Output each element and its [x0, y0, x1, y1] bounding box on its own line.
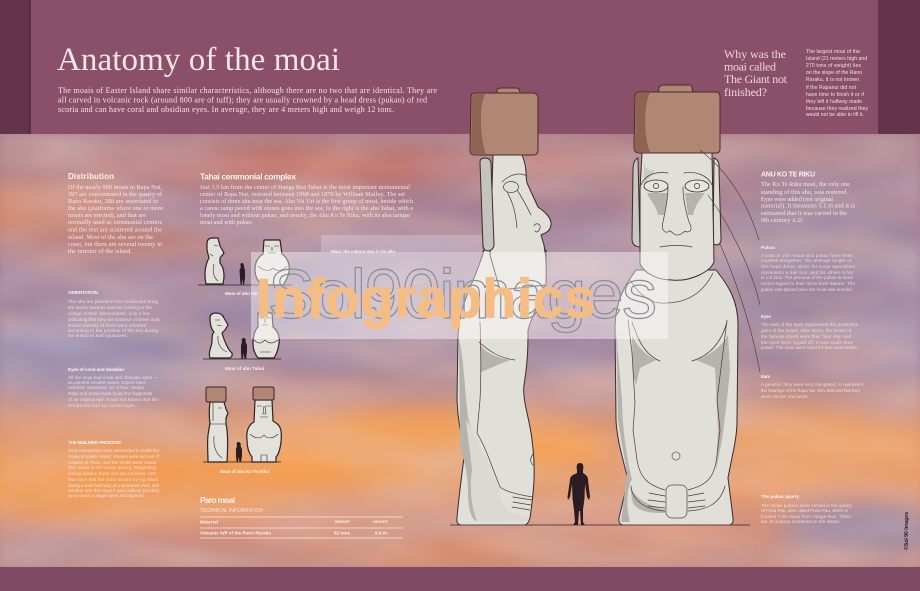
panel: the building process: that says that the moai moved by log sleds	[68, 477, 159, 482]
panel: eyes of coral and obsidian: restored, measured, 10 of their. Sergio	[68, 385, 144, 390]
panel: the pukao quarry: of Puna Pau, also called Puna Pau, which is	[761, 508, 849, 513]
body text: the ahu (platforms where one or more	[68, 205, 163, 212]
sidebar text: they left it halfway made	[806, 99, 862, 105]
panel: orientation: The ahu are placed in four moais and bring	[68, 299, 158, 304]
watermark outline text: Sol90images	[268, 255, 657, 333]
panel: anu ko te riku: The Ko Te Riku moai, the only one	[761, 181, 850, 188]
sidebar heading: why was the moai called The Giant not finished	[724, 47, 788, 99]
body text	[68, 184, 163, 255]
panel: paro moai technical information table	[200, 496, 403, 538]
ground line	[450, 524, 750, 526]
body text: consists of three ahu near the sea. Ahu Vai Uri is the first group of moai, beside which	[200, 198, 413, 205]
panel: ears note: Ears	[761, 374, 770, 379]
icon: human scale figure	[568, 463, 590, 525]
body	[615, 270, 738, 525]
ears	[632, 158, 640, 247]
heading: Tahai ceremonial complex	[200, 172, 296, 182]
head	[490, 155, 551, 290]
small moai group: ahu Ko Te Riku	[203, 387, 281, 474]
sidebar text: on the slope of the Rano	[806, 70, 862, 76]
body text: center of Rapa Nui, restored between 1968 and 1970 by William Mulloy. The set	[200, 191, 405, 198]
body text: coast, but there are several twenty in	[68, 241, 162, 248]
panel: paro moai technical information table: WEIGHT	[335, 520, 351, 524]
sidebar heading: why was the moai called The Giant not finished: Why was the	[724, 47, 786, 61]
panel: eyes of coral and obsidian: Eyes of coral and obsidian	[68, 367, 124, 373]
panel: anu ko te riku: estimated that it was carved in the	[761, 210, 847, 217]
panel: orientation: known thereby of them were oriented	[68, 323, 146, 328]
panel: eyes of coral and obsidian: sculptures had so carved eyes.	[68, 403, 136, 408]
intro text: scoria and can have coral and obsidian eyes. In average, they are 4 meters high and weigh 12 tons.	[58, 105, 394, 114]
panel: eyes note: power. The eyes were used for few ceremonies.	[761, 345, 858, 350]
panel: ears note: the hearings of the Rapa Nui, they believed that they	[761, 388, 861, 393]
body text: Of the nearly 900 moais in Rapa Nui,	[68, 184, 162, 191]
panel: eyes note: the eyes were ripped off. It was made their	[761, 340, 854, 345]
large front view moai hat	[634, 85, 720, 153]
watermark	[251, 235, 668, 339]
panel: orientation: the backs towards and are looking to the	[68, 305, 152, 310]
panel: ears note: A general, they were very elongated, to represent	[761, 382, 864, 387]
large side view moai	[457, 155, 551, 525]
sidebar text: Raraku. It is not known	[806, 77, 859, 83]
body text	[200, 184, 413, 226]
watermark solid text: Infographics	[256, 267, 595, 329]
sidebar text: would not be able to lift it.	[806, 112, 864, 118]
panel: pukao note: A total of 100 moais with pukao have been	[761, 253, 853, 258]
panel: pukao note: represents a hair bun, and for others a hat	[761, 270, 854, 275]
caption: Moai of ahu Ko Te Riku	[220, 469, 269, 474]
panel: anu ko te riku	[761, 172, 856, 224]
panel: the pukao quarry: are 31 pukaos scattered on the island.	[761, 519, 840, 524]
sidebar text: The largest moai of the	[806, 49, 860, 55]
panel: anu ko te riku: 9th century A.D.	[761, 217, 804, 224]
panel: eyes of coral and obsidian: Rapu and Sonia Haoa found the fragments	[68, 391, 153, 396]
panel: anu ko te riku: ANU KO TE RIKU	[761, 172, 815, 178]
panel: pukao note: this head dress, which for some specialists	[761, 264, 856, 269]
large front view moai	[615, 153, 738, 525]
watermark note: Moai, the culture was in its ahu	[331, 249, 395, 254]
body text: moais are erected), and that are	[68, 212, 146, 219]
panel: the building process: that stood in the same quarry. Regarding	[68, 465, 156, 470]
heading: Distribution	[68, 172, 114, 181]
panel: the building process: during a work harmony of a seasoned chief, and	[68, 483, 159, 488]
credit: ©Sol 90 Images	[903, 512, 910, 550]
body text: the interior of the island.	[68, 248, 132, 255]
panel: the building process: up to reach a stage open and tapered.	[68, 493, 145, 498]
intro text	[58, 86, 437, 114]
panel: orientation	[68, 290, 161, 338]
human	[236, 442, 242, 462]
small moai group: ahu Tahai	[203, 313, 281, 371]
panel: ears note: were shorter and wider.	[761, 394, 809, 399]
panel: paro moai technical information table: 9.8 m	[375, 530, 387, 536]
panel: paro moai technical information table: Material	[200, 520, 218, 524]
body text: moai and with pukao.	[200, 220, 253, 226]
intro text: all carved in volcanic rock (around 800 are of tuff); they are usually crowned by a head dress (pukao) of red	[58, 96, 427, 104]
panel: the building process: moais of Easter Island. Statues were torn out of	[68, 454, 160, 459]
panel: the pukao quarry	[761, 494, 853, 524]
panel: the building process: volcano at Rano, and the moais were raised	[68, 460, 156, 465]
panel: orientation: the solstices and equinoxes.	[68, 333, 128, 338]
sidebar text	[806, 49, 868, 118]
sidebar text: have time to finish it or if	[806, 92, 865, 98]
panel: the pukao quarry: located 7 km away from Hanga Roa. There	[761, 514, 851, 519]
panel: paro moai technical information table: 82 tons	[334, 530, 350, 536]
body text: normally used as ceremonial centers	[68, 219, 163, 226]
panel: the pukao quarry: The pukao quarry	[761, 494, 799, 499]
panel: eyes of coral and obsidian: All the moai had coral and obsidian eyes —	[68, 375, 158, 380]
panel: pukao note: recent regard to their three-level feature. The	[761, 281, 855, 286]
panel: pukao note	[761, 245, 856, 292]
front moai	[247, 400, 281, 462]
leader lines	[700, 150, 760, 372]
body text: 397 are concentrated in the quarry of	[68, 191, 163, 198]
panel: orientation: indicating that they are instance of sheer daily	[68, 317, 161, 322]
large side view moai hat	[470, 88, 538, 155]
panel: the pukao quarry: The moais pukaos were carved in the quarry	[761, 503, 853, 508]
panel: pukao note: pukao was placed once the moai was erected.	[761, 287, 853, 292]
panel: orientation: village of their descendants; only a few	[68, 311, 151, 316]
title: Anatomy of the moai	[57, 42, 340, 78]
panel: distribution	[68, 172, 163, 255]
panel: the building process: another one that says it was walked standing	[68, 488, 159, 493]
panel: paro moai technical information table: TECHNICAL INFORMATION	[200, 508, 263, 514]
panel: the building process: THE BUILDING PROCESS	[68, 440, 122, 446]
caption: Moai of ahu Tahai	[225, 366, 264, 371]
panel: pukao note: is 1.8 tons. The process of the pukao is more	[761, 275, 853, 280]
small moai group: ahu Vai Uri	[198, 238, 292, 296]
panel: eyes note	[761, 314, 858, 350]
body text: a canoe ramp paved with stones goes into the sea, to the right is the ahu Tahai, with a	[200, 206, 413, 212]
panel: anu ko te riku: standing of this ahu, was restored.	[761, 189, 848, 196]
sidebar heading: why was the moai called The Giant not finished: moai called	[724, 60, 776, 74]
body text: Rano Raraku, 288 are associated to	[68, 198, 158, 205]
body	[457, 250, 546, 525]
caption: Moai of ahu Vai Uri	[225, 291, 265, 296]
background sky	[0, 134, 920, 567]
ear	[480, 158, 494, 251]
body text: lonely moai and without pukao, and nearby, the Ahu Ko Te Riku, with its also unique	[200, 213, 410, 219]
body text: Just 1.5 km from the center of Hanga Roa Tahai is the most important monumental	[200, 184, 410, 191]
panel: pukao note: counted altogether. The average height of	[761, 258, 852, 263]
panel: orientation: ORIENTATION	[68, 290, 99, 295]
body text: and the rest are scattered around the	[68, 226, 162, 234]
panel: eyes note: the famous chiefs went their final step and	[761, 334, 851, 339]
sidebar heading: why was the moai called The Giant not finished: finished?	[724, 85, 767, 99]
panel: eyes of coral and obsidian: of an original eye. It was not known that the	[68, 397, 158, 402]
panel: the building process: transportation there are two theories; one	[68, 471, 156, 476]
panel: paro moai technical information table: HEIGHT	[373, 520, 389, 524]
sidebar heading: why was the moai called The Giant not finished: The Giant not	[724, 72, 788, 86]
top banner	[0, 0, 920, 134]
panel: pukao note: Pukao	[761, 245, 775, 250]
panel: the building process	[68, 440, 160, 498]
panel: anu ko te riku: material). It measures 5.1 m and it is	[761, 202, 856, 210]
eye	[504, 182, 518, 192]
panel: eyes note: The task of the eyes symbolised the protective	[761, 322, 858, 327]
panel: orientation: according to the position of the sun during	[68, 328, 158, 333]
panel: eyes of coral and obsidian: as pointed circular cases. Expert have	[68, 380, 146, 385]
sidebar text: because they realized they	[806, 106, 868, 112]
panel: eyes of coral and obsidian	[68, 367, 158, 408]
sidebar text: Island (21 meters high and	[806, 56, 867, 62]
panel: eyes note: gaze of the moais. After some, the moais of	[761, 328, 852, 333]
side moai	[208, 402, 228, 462]
panel: ears note	[761, 374, 864, 399]
panel: the building process: Early researchers were astonished to doubt the	[68, 448, 159, 453]
bottom strip	[0, 567, 920, 591]
panel: paro moai technical information table: Paro moai	[200, 496, 235, 505]
panel: tahai ceremonial complex	[200, 172, 413, 226]
body text: island. Most of the ahu are on the	[68, 234, 153, 241]
intro text: The moais of Easter Island share similar characteristics, although there are no two that are identical. They are	[58, 86, 437, 95]
sidebar text: if the Rapanui did not	[806, 85, 857, 91]
panel: paro moai technical information table: Volcanic tuff of the Rano Raraku	[200, 530, 271, 536]
panel: anu ko te riku: Eyes were added (not original	[761, 196, 833, 203]
neck	[630, 273, 713, 303]
sidebar text: 270 tons of weight) lies	[806, 63, 862, 69]
head	[640, 153, 714, 280]
panel: eyes note: Eyes	[761, 314, 771, 319]
